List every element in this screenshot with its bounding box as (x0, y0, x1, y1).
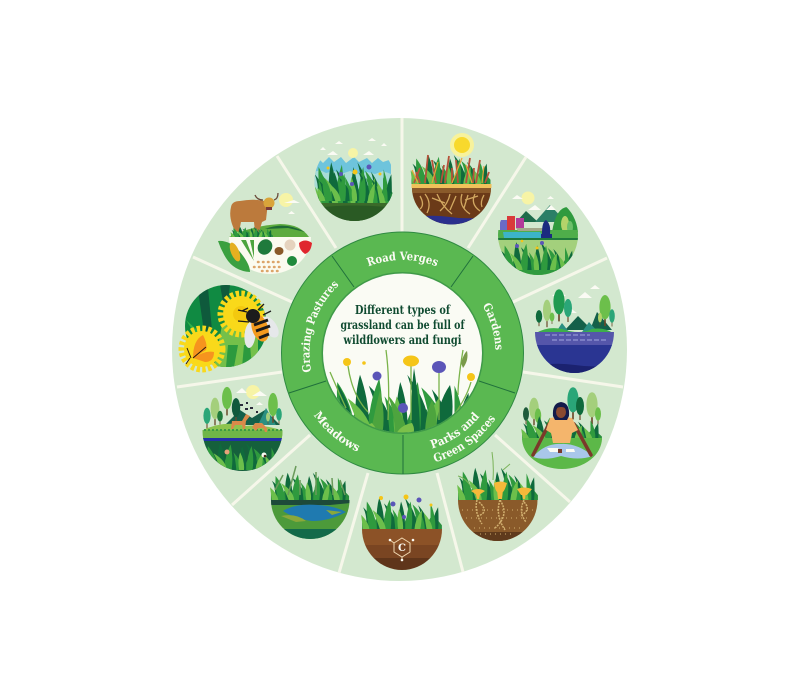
ring label: Road Verges: Road Verges (366, 252, 438, 266)
hill (229, 224, 309, 237)
centre heading: grassland can be full of (340, 318, 465, 332)
carbon hexagon icon: C (398, 543, 406, 554)
vignette: garden landscape (498, 192, 582, 276)
vignette: deer on hillside (200, 385, 284, 473)
flowers (343, 356, 475, 413)
vignette: highland cow and food (218, 193, 312, 274)
ring label: Parks and Green Spaces: Parks and (430, 412, 480, 448)
centre heading: wildflowers and fungi (343, 333, 462, 347)
ring label: Grazing Pastures: Grazing Pastures (301, 281, 338, 372)
icon: bee (238, 304, 282, 348)
vignette: wetland pond (270, 466, 351, 540)
vignette: soil with sun and roots (410, 133, 494, 226)
vignette: soil with mushrooms (456, 452, 540, 542)
icon: butterfly on flower (184, 331, 220, 367)
centre heading: Different types of (355, 303, 451, 317)
ring label: Parks and Green Spaces: Green Spaces (434, 416, 495, 462)
centre heading (340, 303, 465, 347)
corn (218, 240, 254, 272)
centre panel (323, 274, 482, 436)
food bowl (229, 237, 311, 274)
icon: dandelion (223, 296, 259, 332)
vignette: soil with carbon symbol (360, 494, 444, 572)
vignette: lake with trees (534, 285, 615, 375)
ring label: Gardens: Gardens (484, 303, 502, 350)
vignette: bee and butterfly on dandelions (184, 285, 282, 367)
segment spokes (177, 118, 623, 573)
ring label: Meadows: Meadows (314, 410, 360, 451)
outer disc (172, 118, 627, 581)
central ring (281, 232, 524, 474)
highland cow (230, 193, 278, 232)
vignette: person meditating (521, 387, 602, 469)
centre wildflower illustration (327, 350, 476, 436)
vignette: wildflower verge (313, 138, 396, 222)
